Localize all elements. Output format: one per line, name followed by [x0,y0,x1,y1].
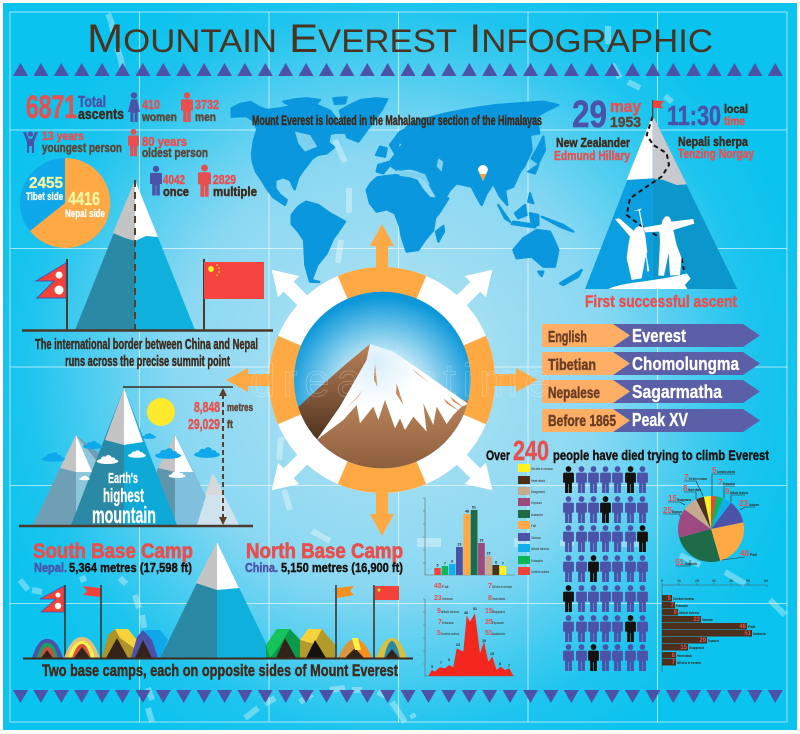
pie chart: causes of death: 7 [718,478,723,487]
stat: youngest person [23,129,122,155]
title: MOUNTAIN EVEREST INFOGRAPHIC [87,17,713,61]
pictogram: people who died [563,466,648,671]
bar chart: causes of death: 5 [437,564,439,568]
bar chart: causes of death: 15 [487,552,490,556]
South Base Camp: South Base Camp [33,540,193,563]
North Base Camp: 5,150 metres (16,900 ft) [281,560,403,575]
height lines and arrow [19,387,253,526]
horizontal bar chart: Avalanche [753,631,766,636]
stat: youngest person: youngest person [42,141,122,155]
pie chart: causes of death: Unknown [749,502,759,507]
orange cardinal arrows [226,224,538,536]
deaths headline: 240 [513,435,549,466]
location pin [478,165,488,181]
chart legend: Avalanche [531,512,543,517]
ring [281,279,483,481]
climber: Norgay: Tenzing Norgay [678,146,755,161]
bar chart: causes of death: 48 [465,510,469,514]
horizontal bar chart: Disappeared [689,645,704,650]
area chart: 8 [499,662,501,666]
chart labels list: 51 [485,630,493,637]
height mountains: mountain [92,502,156,528]
white diagonal arrows [261,259,503,501]
horizontal bar chart: 48 [739,624,747,630]
chart labels list: 23 [434,595,442,602]
first ascent caption: First successful ascent [585,292,737,311]
row 3 [563,525,648,552]
stat: men: 3732 [195,97,219,112]
chart legend: Exhaustion [531,558,543,563]
stat: multiple: 2829 [213,173,236,187]
first ascent mountain with climbers [585,100,737,289]
stat: total ascents: ascents [78,106,124,123]
horizontal bar chart: 50 [746,579,750,583]
climber: Hillary: New Zealander [556,135,630,150]
pie chart: causes of death: Disappeared [677,497,691,502]
chart labels list [434,583,512,637]
horizontal bar chart: 29 [699,638,707,644]
central mountain [160,542,273,658]
area chart: 23 [456,643,460,647]
area chart: 51 [473,607,477,611]
stat: multiple: multiple [213,185,257,199]
name: Tibetian: Tibetian [548,357,596,374]
stat: youngest person: 13 years [42,129,84,143]
mountain caption: Earth's [108,470,138,487]
bar chart: causes of death: 29 [480,538,483,542]
pie chart: causes of death [663,466,759,567]
chart labels list: 7 [488,583,492,590]
name: Before 1865 [542,409,760,432]
horizontal bar chart: 10 [677,579,681,583]
chart legend: Altitude sickness [531,546,549,551]
horizontal bar chart: 30 [712,579,716,583]
climber: Hillary [554,135,631,163]
area chart [423,599,515,676]
bottom triangle border [13,690,788,703]
pie chart: causes of death: 15 [668,494,677,503]
flag: Nepal [36,259,67,330]
pie chart: causes of death: Fall [750,552,757,557]
area chart: 7 [440,661,442,665]
border caption [35,337,258,370]
sun [147,398,175,426]
area chart: 7 [508,664,510,668]
chart legend [518,464,553,575]
horizontal bar chart [661,579,768,672]
North Base Camp: China. [245,560,278,575]
height numbers: ft [227,419,233,431]
chart legend: Heart attack [531,478,545,483]
name: English: English [548,329,587,346]
row 1 [563,466,648,493]
bar chart: causes of death [423,498,515,575]
border ground line [22,329,273,332]
horizontal bar chart: Exposure [708,638,719,643]
row 2 [563,496,648,523]
chart labels list: Disappeared [492,609,505,614]
chart labels list: Exhaustion [442,620,454,625]
date of ascent [572,94,641,136]
horizontal bar chart: 20 [695,579,699,583]
names of Everest [542,324,760,432]
ground line [23,658,413,660]
horizontal bar chart: 7 [672,660,676,666]
chart labels list: 7 [438,619,442,626]
chart labels list: 8 [488,595,492,602]
North Base Camp [245,540,403,575]
horizontal bar chart: 60 [764,579,768,583]
date of ascent: may [610,97,641,116]
horizontal bar chart: Still alive in crevasse [677,660,701,665]
base camp caption: Two base camps, each on opposite sides of Mount Everest [42,661,398,680]
stat: women [128,92,177,124]
bar chart: causes of death: 9 [451,560,453,564]
pie chart: causes of death: Exposure [672,509,682,514]
pie chart: causes of death: 8 [683,484,688,493]
pie: Tibet vs Nepal side [20,158,110,248]
flag: China [204,259,264,330]
base camp scene [23,542,413,658]
name: Nepalese: Sagarmatha [632,382,723,402]
bar chart: causes of death: 51 [472,506,476,510]
chart labels list: Avalanche [492,631,506,636]
chart labels list: 5 [437,630,441,637]
stat: once: once [163,185,189,199]
chart labels list: 15 [485,608,493,615]
chart labels list: Exposure [492,620,505,625]
central compass emblem [226,224,550,536]
pie: Tibet vs Nepal side: 2455 [29,175,63,192]
South Base Camp: Nepal. [34,560,67,575]
horizontal bar chart: Unknown [702,617,713,622]
pie chart: causes of death: Altitude sickness [730,490,748,495]
stat: once: 4042 [163,173,185,187]
chart labels list: Heart attack [492,596,505,601]
chart labels list: Fall [442,584,449,589]
horizontal bar chart: 9 [674,610,678,616]
stat: men [181,92,219,124]
stat: women: 410 [142,97,160,112]
area chart: 48 [464,611,468,615]
name: Before 1865: Before 1865 [548,413,616,430]
horizontal bar chart: Exhaustion [676,603,688,608]
pie chart: causes of death: 7 [684,473,689,482]
horizontal bar chart: 40 [729,579,733,583]
South Base Camp: 5,364 metres (17,598 ft) [69,560,192,575]
stat: multiple [198,164,257,199]
name: Tibetian [542,352,760,375]
height mountains [33,388,239,528]
height numbers: 8,848 [194,399,220,416]
pie chart: causes of death: 9 [725,487,730,496]
border mountain [75,180,195,330]
mountain illustration [294,292,477,473]
chart labels list: Unknown [442,596,453,601]
row 6 [563,615,648,642]
pie chart: causes of death: Still alive in crevasse [689,476,707,481]
horizontal bar chart: 7 [671,603,675,609]
top triangle border [13,63,788,76]
height numbers [188,399,253,433]
bar chart: causes of death: 8 [495,560,497,564]
horizontal bar chart: 8 [672,653,676,659]
bar chart: causes of death: 7 [444,562,446,566]
pie chart: causes of death: 51 [675,558,684,567]
pie chart: causes of death: 5 [712,466,717,475]
name: Nepalese: Nepalese [548,385,600,402]
North Base Camp: North Base Camp [246,540,403,563]
pie: Tibet vs Nepal side: 4416 [68,189,100,209]
climber: Norgay [678,134,755,161]
horizontal bar chart: 5 [668,596,672,602]
pie: Tibet vs Nepal side: Tibet side [26,191,63,203]
chart legend: Cerebral oedema [531,569,549,574]
stat: total ascents: 6871 [26,89,77,125]
pie chart: causes of death: Exhaustion [723,481,735,486]
row 7 [563,644,648,671]
chart labels list: Altitude sickness [441,609,459,614]
row 4 [563,555,648,582]
flags [40,585,399,658]
chart legend: Still alive in crevasse [531,466,553,471]
climber: Hillary: Edmund Hillary [554,148,631,163]
name: English [542,324,760,347]
chart legend: Fall [531,523,536,528]
bar chart: causes of death: 23 [458,542,461,546]
time of ascent: local [724,102,748,116]
pie chart: causes of death: Cerebral oedema [717,469,735,474]
stat: women: women [141,110,177,124]
pie chart: causes of death: 25 [663,506,672,515]
height mountains: highest [103,486,144,507]
height numbers: metres [227,402,253,414]
name: Tibetian: Chomolungma [632,354,740,374]
South Base Camp [33,540,193,575]
horizontal bar chart: 0 [661,579,663,583]
deaths headline: Over [486,447,510,463]
horizontal bar chart: 23 [693,617,701,623]
horizontal bar chart: Cerebral oedema [673,596,694,601]
bar chart: causes of death: 7 [502,562,504,566]
name: English: Everest [632,326,686,346]
chart labels list: 9 [437,608,441,615]
chart labels list: Cerebral oedema [441,631,459,636]
area chart: 15 [490,652,494,656]
chart legend: Unknown [531,535,541,540]
horizontal bar chart: 15 [680,645,688,651]
row 5 [563,585,648,612]
pie: Tibet vs Nepal side: Nepal side [65,208,105,220]
tents [32,629,407,658]
world map [232,97,582,285]
horizontal bar chart: Altitude sickness [679,610,699,615]
horizontal bar chart: Heart attack [677,653,693,658]
chart legend: Disappeared [531,489,545,494]
stat: oldest person: 80 years [142,135,187,149]
chart legend: Exposure [531,500,542,505]
stat: once [150,166,189,199]
stat: oldest person: oldest person [142,146,208,160]
border caption: The international border between China and Nepal [35,337,258,353]
watermark: dreamstime [250,354,550,406]
pie chart: causes of death: 48 [740,549,749,558]
date of ascent: 1953 [610,114,641,131]
clouds [42,433,220,462]
area chart: 29 [482,639,486,643]
border caption: runs across the precise summit point [65,354,230,370]
stat: oldest person [128,129,208,160]
height numbers: 29,029 [188,416,220,433]
map caption: Mount Everest is located in the Mahalangur section of the Himalayas [252,112,542,128]
stat: total ascents: Total [78,94,106,111]
stat: men: men [195,110,216,124]
date of ascent: 29 [572,94,607,136]
area chart: 5 [431,665,433,669]
pie chart: causes of death: 23 [739,499,748,508]
name: Before 1865: Peak XV [632,410,688,430]
pie chart: causes of death: Avalanche [685,561,697,566]
time of ascent: time [724,114,745,128]
time of ascent: 11:30 [667,100,721,131]
deaths headline [486,435,769,466]
pie chart: causes of death: Heart attack [688,487,701,492]
chart labels list: 25 [485,619,493,626]
area chart: 9 [448,658,450,662]
climber: Norgay: Nepali sherpa [678,134,749,149]
chart labels list: 48 [434,583,442,590]
chart labels list: Still alive in crevasse [492,584,512,589]
name: Nepalese [542,380,760,403]
horizontal bar chart: Fall [748,624,755,629]
horizontal bar chart: 51 [744,631,752,637]
